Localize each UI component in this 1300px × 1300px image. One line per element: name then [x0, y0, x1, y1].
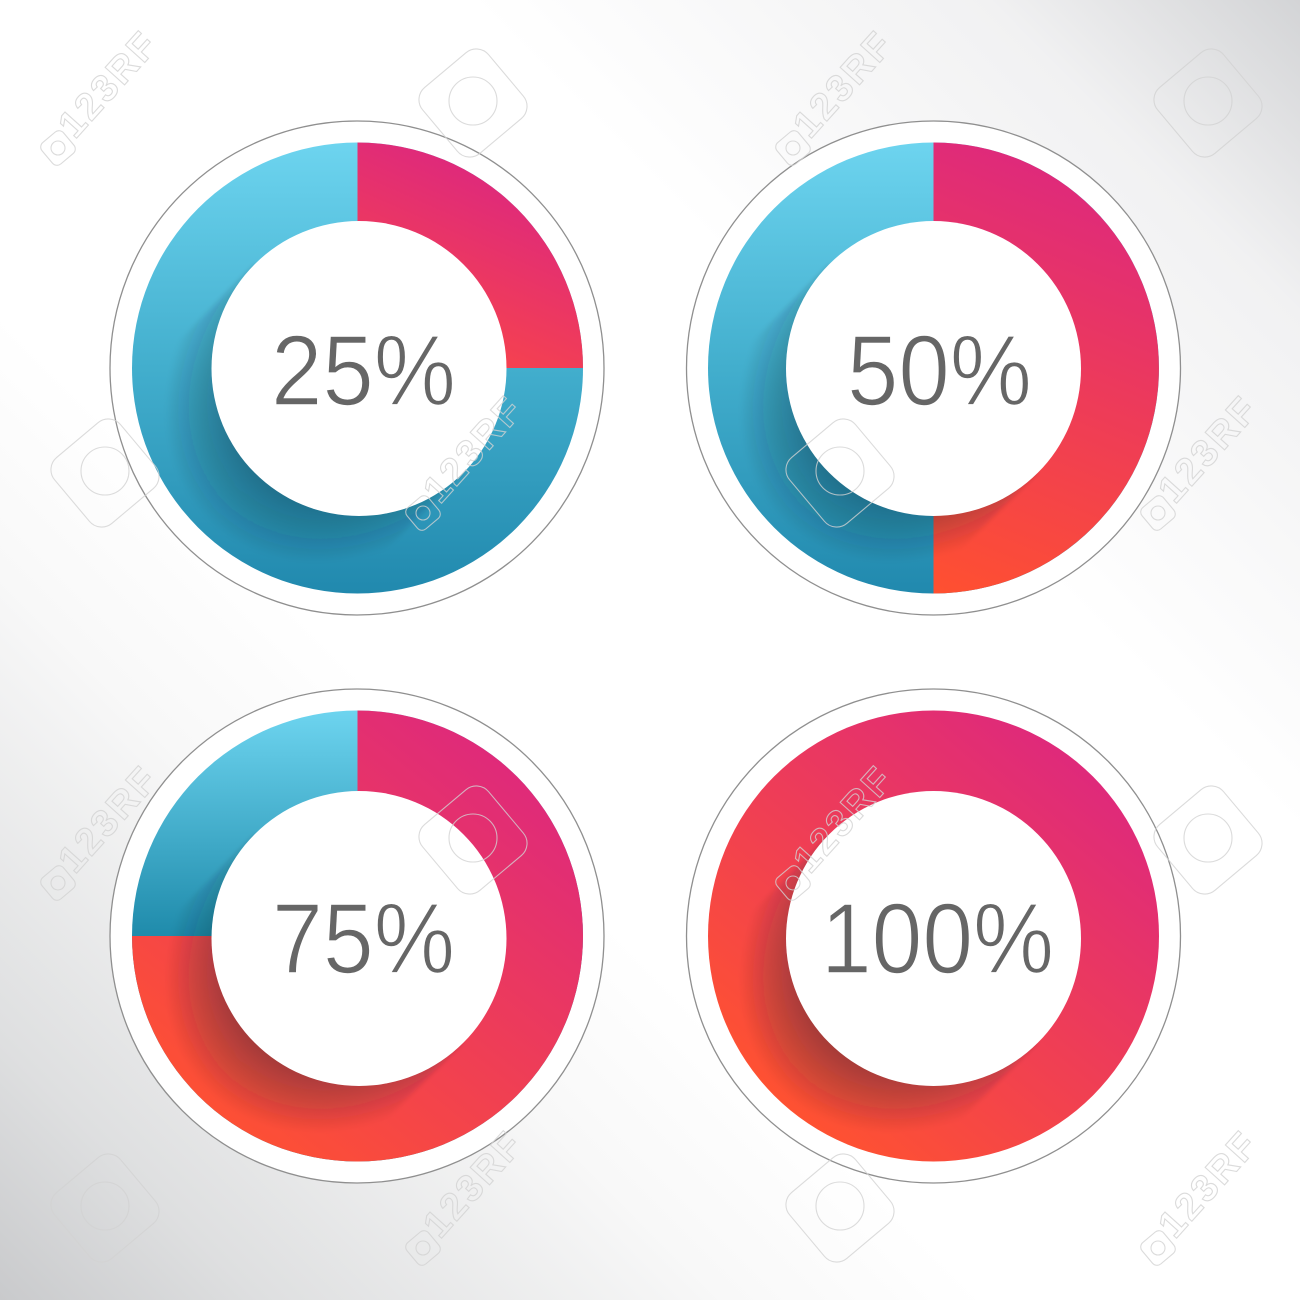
blue segment: [132, 710, 583, 1162]
value 100%: 100%: [821, 883, 1054, 995]
outer ring: [686, 689, 1180, 1183]
watermark stamps: 123RF: [1150, 390, 1265, 511]
blue segment: [708, 142, 1159, 594]
long shadow: [745, 834, 1038, 1127]
watermark stamps: 123RF: [415, 390, 530, 511]
watermark stamps: 123RF: [415, 1125, 530, 1246]
centre disc: [212, 791, 506, 1086]
red segment 75%: [132, 710, 583, 1162]
centre disc: [786, 791, 1081, 1086]
outer ring: [110, 121, 604, 615]
long shadow: [170, 835, 463, 1127]
panel: 50% donut: [660, 121, 1180, 642]
long shadow: [746, 264, 1038, 554]
panel: 100% donut: [660, 689, 1180, 1212]
panel: 75% donut: [85, 689, 604, 1212]
outer ring: [686, 121, 1180, 615]
watermark stamps: 123RF: [50, 25, 165, 146]
value 25%: 25%: [271, 315, 456, 427]
watermark stamps: 123RF: [1150, 1125, 1265, 1246]
watermark stamps: 123RF: [785, 760, 900, 881]
watermark stamps: 123RF: [785, 25, 900, 146]
outer ring: [110, 689, 604, 1183]
value 75%: 75%: [272, 883, 455, 995]
panel: 25% donut: [85, 121, 604, 642]
watermark stamps: 123RF: [50, 760, 165, 881]
blue segment: [132, 142, 583, 594]
value 50%: 50%: [847, 315, 1032, 427]
centre disc: [786, 221, 1081, 516]
long shadow: [172, 264, 461, 554]
red ring 100%: [708, 710, 1159, 1162]
centre disc: [212, 221, 506, 516]
red segment 25%: [358, 142, 583, 368]
red segment 50%: [934, 142, 1159, 594]
